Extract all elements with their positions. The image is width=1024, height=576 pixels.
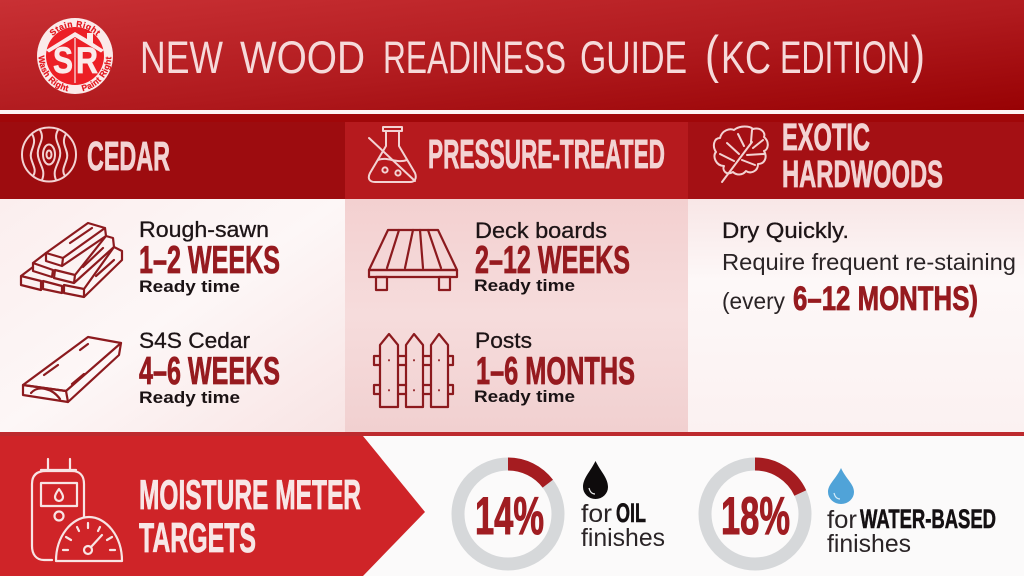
caption: ready time: Ready time [474, 276, 575, 295]
logo: Stain Right: Paint Right [81, 56, 112, 92]
caption: ready time: Ready time [474, 387, 575, 406]
logo: Stain Right: Stain Right [50, 20, 100, 36]
panel: cedar [0, 122, 345, 432]
label: posts: Posts [475, 328, 532, 353]
text: for oil finishes [581, 498, 665, 552]
logo: Stain Right: R [76, 40, 98, 81]
panel: moisture meter targets arrow [0, 436, 425, 576]
title: EDITION [780, 32, 910, 83]
text: for water-based finishes: finishes [827, 530, 911, 558]
logo: Stain Right [37, 18, 113, 94]
donut chart: 18%: 18% [721, 487, 790, 546]
icon: oil drop [583, 461, 608, 499]
bottom band [0, 432, 1024, 576]
panel: moisture meter targets arrow: TARGETS [139, 514, 256, 561]
icon: stacked lumber [21, 223, 122, 297]
icon: monstera leaf [714, 126, 768, 182]
text: for water-based finishes: for [827, 506, 857, 534]
logo: Stain Right: S [53, 40, 73, 81]
divider [0, 110, 1024, 114]
panel: pressure-treated [345, 122, 688, 432]
value: 4-6 weeks: 4–6 WEEKS [139, 350, 280, 393]
heading: moisture meter targets: MOISTURE METER [139, 471, 361, 518]
title: KC [721, 32, 771, 83]
donut chart: 18% [705, 464, 805, 564]
value: 1-2 weeks: 1–2 WEEKS [139, 239, 280, 282]
heading: pressure-treated: PRESSURE-TREATED [428, 131, 665, 177]
heading: exotic hardwoods [782, 117, 943, 196]
text: dry quickly: Dry Quickly. [722, 218, 849, 243]
logo: Stain Right: Wash Right [38, 55, 69, 92]
caption: ready time: Ready time [139, 388, 240, 407]
caption: ready time: Ready time [139, 277, 240, 296]
donut chart: 14% [458, 464, 558, 564]
icon: water drop [828, 468, 854, 504]
panel: exotic hardwoods [688, 117, 1024, 432]
donut chart: 14%: 14% [475, 487, 544, 546]
text: for water-based finishes [827, 504, 996, 558]
title: ( [705, 26, 720, 84]
value: 1-6 months: 1–6 MONTHS [476, 350, 635, 393]
title: READINESS [383, 32, 566, 83]
icon: deck [369, 230, 457, 290]
header band [0, 0, 1024, 110]
value: 2-12 weeks: 2–12 WEEKS [475, 239, 630, 282]
text: for oil finishes: for [581, 500, 612, 528]
label: rough-sawn: Rough-sawn [139, 217, 269, 242]
title [140, 26, 925, 84]
icon: moisture meter [32, 459, 122, 561]
icon: s4s board [23, 337, 121, 402]
title: WOOD [240, 32, 365, 83]
title: NEW [140, 32, 223, 83]
text: for oil finishes: OIL [616, 498, 646, 528]
text: for oil finishes: finishes [581, 524, 665, 552]
icon: wood grain circle [22, 128, 76, 182]
text: require frequent re-staining: Require frequent re-staining [722, 249, 1016, 275]
text: every: (every [722, 288, 785, 314]
icon: fence [374, 334, 453, 407]
heading: cedar: CEDAR [87, 133, 170, 179]
title: ) [911, 26, 925, 84]
label: s4s cedar: S4S Cedar [139, 328, 251, 353]
heading: exotic hardwoods: EXOTIC [782, 117, 870, 159]
title: GUIDE [580, 32, 687, 83]
label: deck boards: Deck boards [475, 218, 607, 243]
icon: flask [369, 127, 416, 182]
